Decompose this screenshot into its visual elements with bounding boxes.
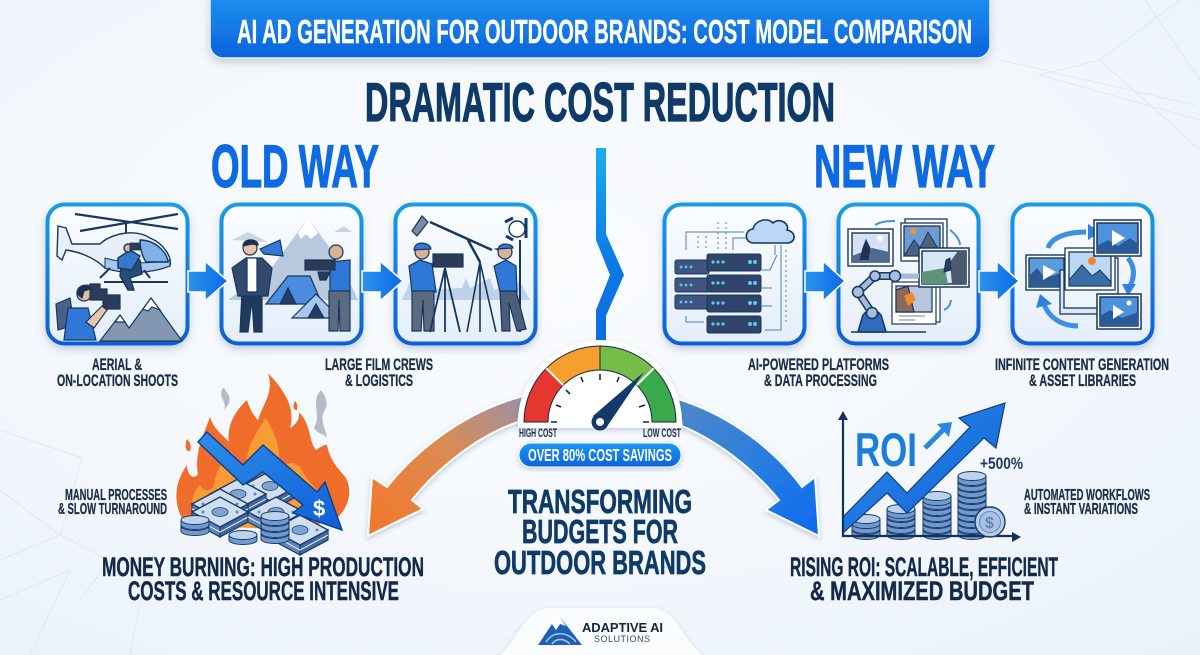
gauge (518, 340, 682, 440)
center text: transforming budgets: BUDGETS FOR (522, 513, 678, 550)
heading: money burning (102, 552, 424, 606)
savings pill: OVER 80% COST SAVINGS (528, 445, 672, 465)
label: large film crews: LARGE FILM CREWS (325, 355, 433, 374)
icon: center image stack (1060, 248, 1118, 314)
label: aerial and on-location shoots: AERIAL & (92, 355, 142, 374)
center divider chevron (596, 148, 624, 345)
icon: left video card (1026, 255, 1066, 290)
icon: director with megaphone (232, 240, 283, 332)
ROI text: ROI (855, 423, 917, 476)
label: AI platforms: & DATA PROCESSING (764, 371, 877, 390)
gauge needle (593, 372, 644, 428)
curved arrow: to new way outcome (678, 399, 819, 536)
center text: transforming budgets (494, 483, 706, 581)
heading: rising ROI (790, 552, 1058, 606)
heading: old way: OLD WAY (211, 133, 379, 200)
icon: right assistant with tripod (467, 244, 526, 332)
title banner (210, 0, 990, 58)
chart: ROI growth (838, 403, 1023, 542)
icon: robot arm (851, 270, 926, 332)
logo tab: SOLUTIONS (594, 634, 650, 644)
chart: ROI growth: $ (985, 515, 994, 532)
logo tab (492, 608, 712, 655)
panel: AI platforms (664, 204, 804, 344)
label: automated workflows: & INSTANT VARIATIONS (1024, 501, 1138, 518)
logo text: ADAPTIVE AI (582, 620, 663, 635)
label: AI platforms (748, 355, 889, 390)
icon: left camera operator on tripod (409, 243, 463, 332)
icon: top right video card (1094, 220, 1141, 256)
icon: helicopter (57, 214, 178, 290)
dollar sign: $ (313, 496, 325, 521)
arrow: panel 4 to 5 (805, 261, 845, 301)
label: aerial and on-location shoots (57, 355, 178, 390)
panel: camera crew (396, 204, 536, 344)
arrow: panel 2 to 3 (362, 261, 403, 301)
logo mountain icon (538, 617, 582, 645)
panel: film crew with tents (222, 204, 362, 344)
coin stacks (852, 472, 986, 540)
label: AI platforms: AI-POWERED PLATFORMS (748, 355, 889, 374)
heading: rising ROI: & MAXIMIZED BUDGET (810, 576, 1034, 606)
money bundles (242, 471, 298, 511)
savings pill (519, 443, 681, 467)
coins (181, 522, 209, 536)
icon: cloud (746, 220, 794, 243)
curved arrow: to old way outcome (368, 396, 523, 536)
zigzag arrow (198, 432, 342, 530)
heading: new way: NEW WAY (814, 133, 995, 200)
smoke (221, 387, 327, 438)
panel: infinite content library (1012, 204, 1152, 344)
label: infinite content (995, 355, 1169, 390)
icon: cameraman (305, 245, 350, 331)
heading: money burning: MONEY BURNING: HIGH PRODUCTION (102, 552, 424, 582)
heading: money burning: COSTS & RESOURCE INTENSIVE (128, 576, 399, 606)
label: large film crews (325, 355, 433, 390)
center text: transforming budgets: TRANSFORMING (508, 483, 692, 520)
gauge ticks (551, 374, 649, 422)
+500%: +500% (980, 454, 1023, 473)
label: manual processes: MANUAL PROCESSES (65, 487, 167, 504)
rising arrow (843, 403, 1005, 533)
icon: circular arrows (1044, 232, 1134, 326)
gauge label: low cost: LOW COST (643, 426, 681, 440)
icon: tents (266, 276, 340, 318)
axes (843, 416, 1014, 536)
panel: AI content robot (838, 204, 978, 344)
dollar coin (975, 507, 1005, 537)
arrow: panel 1 to 2 (188, 261, 228, 301)
small arrow (925, 428, 945, 448)
label: large film crews: & LOGISTICS (345, 371, 413, 390)
label: infinite content: & ASSET LIBRARIES (1029, 371, 1136, 390)
icon: photo of hiker (848, 229, 893, 266)
icon: spot light (505, 218, 526, 332)
label: aerial and on-location shoots: ON-LOCATION SHOOTS (57, 371, 178, 390)
label: manual processes (58, 487, 167, 518)
gauge label: high cost: HIGH COST (519, 426, 557, 440)
icon: lower card (892, 278, 940, 324)
label: automated workflows (1024, 487, 1150, 518)
flames (176, 373, 349, 530)
icon: burning money (176, 373, 349, 555)
flame sparks (186, 401, 297, 451)
icon: photo stack with mountain (901, 219, 947, 261)
icon: photo of climber (919, 248, 969, 287)
icon: boom mic (412, 216, 492, 262)
icon: mountain backdrop (228, 218, 358, 300)
icon: photographer and mountains (56, 284, 182, 341)
center text: transforming budgets: OUTDOOR BRANDS (494, 544, 706, 581)
panel: aerial shoots (48, 204, 188, 344)
arrow: panel 5 to 6 (979, 261, 1019, 301)
heading: dramatic cost reduction: DRAMATIC COST REDUCTION (365, 71, 835, 133)
label: manual processes: & SLOW TURNAROUND (58, 501, 167, 518)
icon: data lines (686, 222, 786, 330)
icon: treeline (402, 278, 530, 300)
icon: bottom right video card (1097, 294, 1141, 329)
icon: small flow arrows (875, 221, 960, 310)
icon: server racks (675, 254, 761, 333)
